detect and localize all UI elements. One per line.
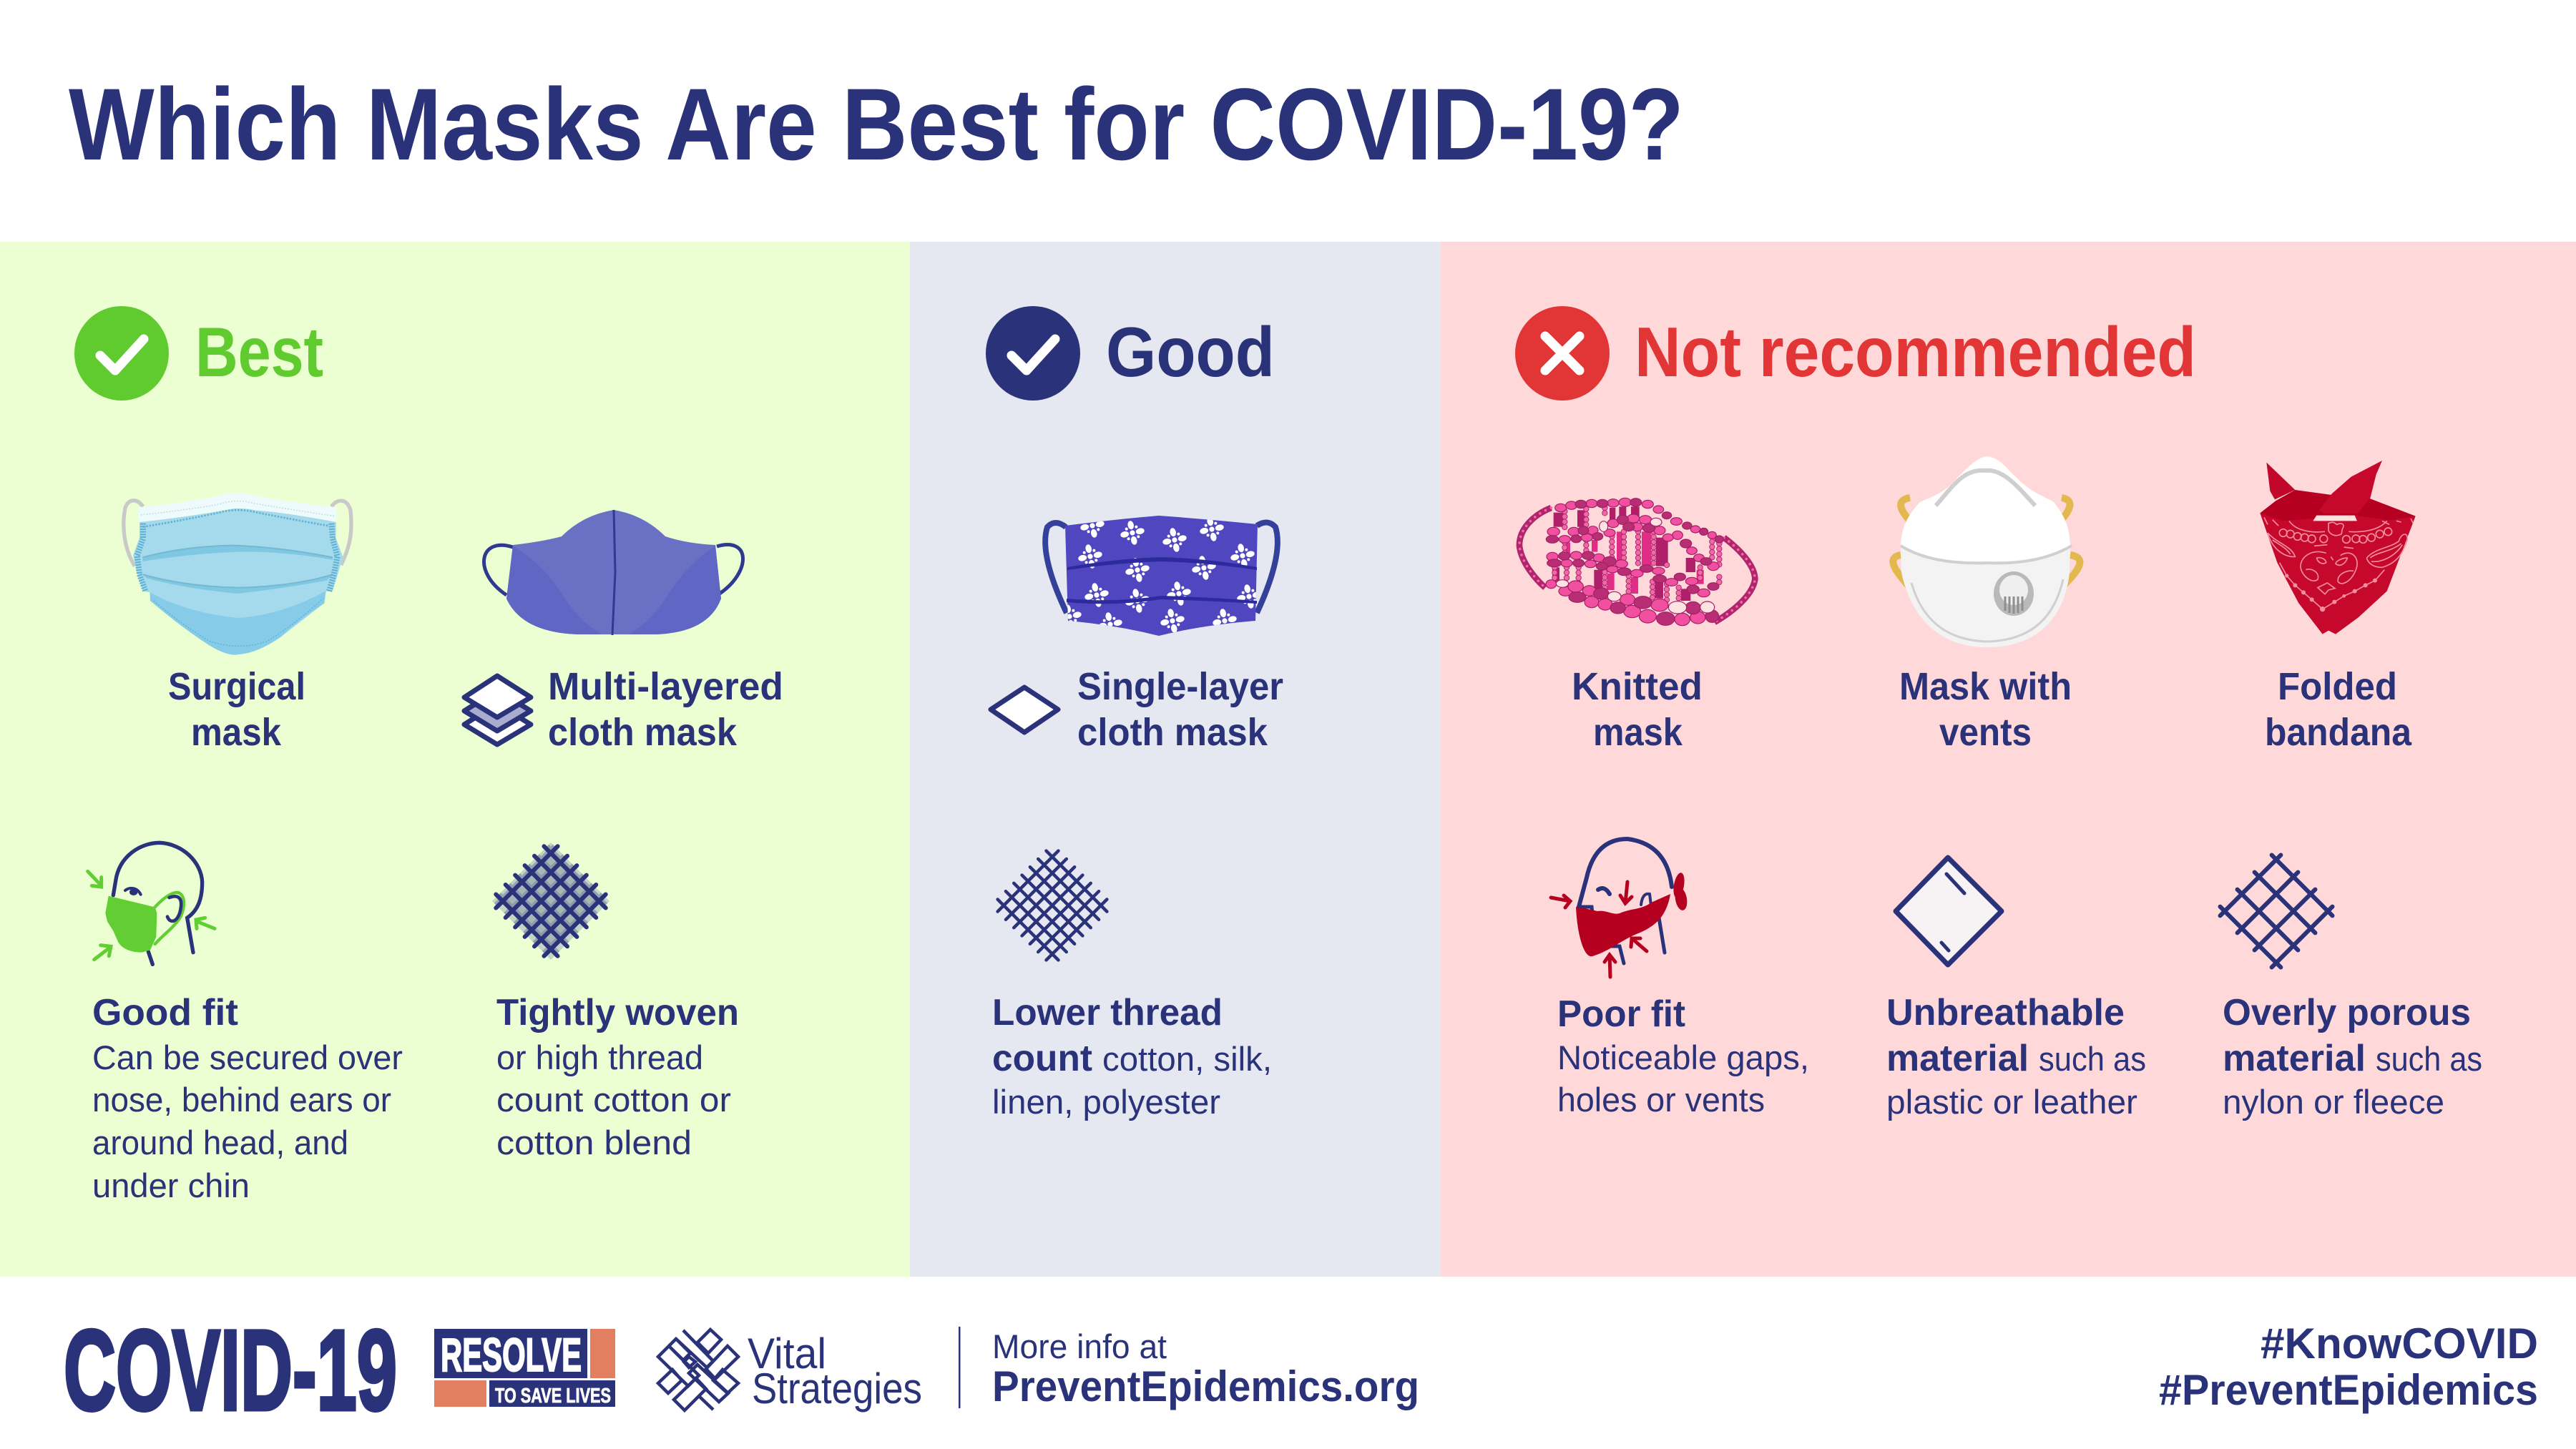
icon: surgical mask: [124, 493, 351, 654]
label: multi-layered cloth mask: Multi-layered: [548, 665, 783, 708]
text: more info: PreventEpidemics.org: [992, 1362, 1419, 1410]
label: knitted mask: mask: [1593, 711, 1683, 754]
icon: multi-layered cloth mask: [484, 510, 743, 635]
icon: layered fabric: [464, 676, 531, 745]
icon: lower thread count weave: [991, 845, 1113, 966]
logo: vital strategies text: Strategies: [752, 1365, 922, 1413]
text: unbreathable material: [1886, 992, 2146, 1121]
text: overly porous material: nylon or fleece: [2223, 1083, 2444, 1121]
icon: single layer fabric: [991, 687, 1058, 732]
title: Which Masks Are Best for COVID-19?: [69, 68, 1684, 182]
text: tightly woven: Tightly woven: [496, 992, 739, 1033]
label: single-layer cloth mask: [1077, 665, 1283, 754]
label: knitted mask: [1572, 665, 1703, 754]
text: tightly woven: or high thread: [496, 1038, 703, 1076]
text: good fit: around head, and: [92, 1124, 348, 1161]
text: tightly woven: cotton blend: [496, 1124, 692, 1161]
text: hashtags: #PreventEpidemics: [2159, 1366, 2538, 1414]
text: unbreathable material: plastic or leather: [1886, 1083, 2137, 1121]
panel: best: [0, 242, 910, 1277]
text: tightly woven: count cotton or: [496, 1081, 731, 1119]
text: overly porous material: Overly porous: [2223, 992, 2471, 1033]
text: lower thread count: Lower thread: [992, 992, 1223, 1033]
text: more info: [992, 1327, 1419, 1410]
icon: knitted mask: [1519, 498, 1755, 626]
label: mask with vents: vents: [1939, 711, 2032, 754]
text: more info: More info at: [992, 1327, 1167, 1365]
text: unbreathable material: material: [1886, 1038, 2029, 1079]
text: lower thread count: [992, 992, 1272, 1121]
icon: navy check: [986, 306, 1080, 401]
label: single-layer cloth mask: Single-layer: [1077, 665, 1283, 708]
heading: best: Best: [195, 313, 323, 391]
text: lower thread count: count: [992, 1038, 1092, 1079]
icon: single-layer cloth mask: [1045, 511, 1278, 639]
icon: porous weave: [2215, 850, 2337, 972]
icon: unbreathable material: [1896, 858, 2002, 965]
label: mask with vents: Mask with: [1899, 665, 2072, 708]
icon: mask with vents: [1893, 456, 2080, 647]
icon: good fit face: [88, 843, 215, 964]
logo: resolve to save lives: RESOLVE: [441, 1328, 582, 1381]
text: good fit: nose, behind ears or: [92, 1081, 391, 1119]
label: multi-layered cloth mask: [548, 665, 783, 754]
text: good fit: Good fit: [92, 992, 238, 1033]
text: unbreathable material: such as: [2039, 1040, 2146, 1078]
text: good fit: [92, 992, 403, 1204]
footer: [64, 1306, 2538, 1434]
label: multi-layered cloth mask: cloth mask: [548, 711, 738, 754]
icon: red cross: [1515, 306, 1610, 401]
text: poor fit: Noticeable gaps,: [1557, 1038, 1809, 1076]
heading: not recommended: Not recommended: [1635, 313, 2196, 391]
logo: covid-19 wordmark: COVID-19: [64, 1306, 397, 1434]
logo: resolve to save lives: [434, 1328, 615, 1408]
text: poor fit: [1557, 993, 1809, 1119]
label: knitted mask: Knitted: [1572, 665, 1703, 708]
label: surgical mask: mask: [191, 711, 282, 754]
heading: good: Good: [1106, 313, 1275, 391]
icon: poor fit face: [1551, 839, 1689, 977]
panel: not recommended: [1441, 242, 2576, 1277]
label: folded bandana: [2265, 665, 2412, 754]
text: hashtags: [2159, 1320, 2538, 1414]
text: poor fit: Poor fit: [1557, 993, 1685, 1035]
icon: green check: [74, 306, 169, 401]
text: overly porous material: [2223, 992, 2482, 1121]
text: hashtags: #KnowCOVID: [2261, 1320, 2538, 1367]
logo: resolve to save lives: TO SAVE LIVES: [495, 1385, 611, 1408]
text: lower thread count: cotton, silk,: [1102, 1040, 1272, 1078]
label: folded bandana: bandana: [2265, 711, 2412, 754]
icon: tight weave: [489, 840, 612, 963]
text: poor fit: holes or vents: [1557, 1081, 1765, 1119]
label: folded bandana: Folded: [2278, 665, 2397, 708]
icon: folded bandana: [2260, 461, 2416, 634]
logo: vital strategies text: Vital: [748, 1330, 826, 1377]
label: mask with vents: [1899, 665, 2072, 754]
label: surgical mask: [168, 665, 305, 754]
label: single-layer cloth mask: cloth mask: [1077, 711, 1268, 754]
text: overly porous material: such as: [2376, 1040, 2482, 1078]
text: good fit: under chin: [92, 1166, 250, 1204]
text: lower thread count: linen, polyester: [992, 1083, 1220, 1121]
panel: good: [910, 242, 1441, 1277]
logo: vital strategies text: [748, 1330, 922, 1413]
text: tightly woven: [496, 992, 739, 1161]
text: overly porous material: material: [2223, 1038, 2366, 1079]
text: unbreathable material: Unbreathable: [1886, 992, 2125, 1033]
label: surgical mask: Surgical: [168, 665, 305, 708]
logo: vital strategies mark: [658, 1330, 738, 1410]
text: good fit: Can be secured over: [92, 1038, 403, 1076]
